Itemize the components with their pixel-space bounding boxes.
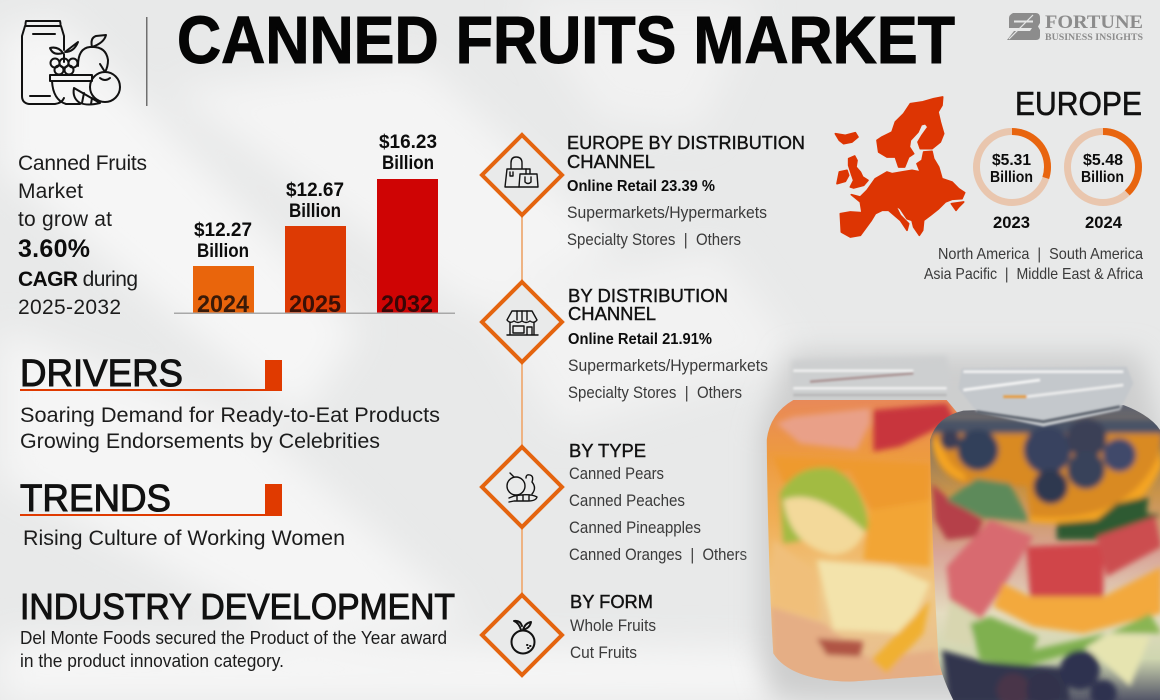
bar chart: $12.27 <box>194 219 252 241</box>
CAGR text block <box>18 152 147 319</box>
bar chart: Billion <box>197 240 249 262</box>
icon: can with fruits <box>22 21 120 104</box>
right jar <box>927 367 1160 700</box>
trends text: Rising Culture of Working Women <box>23 526 345 550</box>
segment: by distribution channel: Online Retail 21.91% <box>568 331 712 348</box>
segment: by distribution channel <box>482 282 768 402</box>
drivers text: Soaring Demand for Ready-to-Eat Products <box>20 403 440 427</box>
trends heading: TRENDS <box>20 478 171 520</box>
donut 2024: $5.48 <box>1083 152 1123 169</box>
segment: by type: Canned Pineapples <box>569 519 701 537</box>
donut 2024: 2024 <box>1085 213 1123 232</box>
timeline line <box>521 210 523 600</box>
donut 2024 <box>1068 132 1138 232</box>
CAGR text block: 3.60% <box>18 235 90 263</box>
segment: Europe by distribution channel <box>482 132 805 249</box>
segment: by type: Canned Oranges | Others <box>569 546 747 564</box>
segment: Europe by distribution channel: Online Retail 23.39 % <box>567 178 715 195</box>
other regions <box>924 246 1143 283</box>
industry development heading: INDUSTRY DEVELOPMENT <box>20 586 455 627</box>
bar chart: 2025 <box>289 291 341 318</box>
segment: Europe by distribution channel: CHANNEL <box>567 151 655 172</box>
segment: by form: Cut Fruits <box>570 644 637 662</box>
CAGR text block: to grow at <box>18 208 112 231</box>
icon: orange <box>482 595 562 675</box>
drivers heading <box>20 353 282 395</box>
segment: by distribution channel: Supermarkets/Hypermarkets <box>568 357 768 375</box>
donut 2023: 2023 <box>993 213 1030 232</box>
segment: by distribution channel: Specialty Stores | Others <box>568 384 742 402</box>
industry development text: Del Monte Foods secured the Product of the Year award <box>20 628 447 648</box>
donut 2023: $5.31 <box>992 152 1031 169</box>
left jar <box>763 356 967 687</box>
drivers text <box>20 403 440 453</box>
CAGR text block: Market <box>18 180 83 203</box>
CAGR text block: Canned Fruits <box>18 152 147 175</box>
donut 2023: Billion <box>990 169 1033 186</box>
trends heading <box>20 478 282 520</box>
segment: by type: Canned Peaches <box>569 492 685 510</box>
icon: shopping bags <box>482 135 562 215</box>
jar shadow <box>760 353 1160 700</box>
segment: by type: Canned Pears <box>569 465 664 483</box>
segment: by form: BY FORM <box>570 591 653 612</box>
drivers heading: DRIVERS <box>20 353 183 395</box>
segment: Europe by distribution channel: Supermarkets/Hypermarkets <box>567 204 767 222</box>
donut 2024: Billion <box>1081 169 1124 186</box>
industry development text <box>20 628 447 671</box>
logo: FORTUNE <box>1045 12 1143 33</box>
industry development text: in the product innovation category. <box>20 651 284 671</box>
segment: by form <box>482 591 656 675</box>
bar chart: $12.67 <box>286 179 344 201</box>
CAGR text block: CAGR during <box>18 268 138 291</box>
divider <box>146 17 148 106</box>
icon: mixed fruits and vegetables <box>482 447 562 527</box>
bar chart <box>174 131 455 318</box>
bar chart: Billion <box>289 200 341 222</box>
CAGR text block: 2025-2032 <box>18 296 121 319</box>
segment: by type <box>482 440 747 564</box>
bar chart: $16.23 <box>379 131 437 153</box>
segment: by distribution channel: BY DISTRIBUTION <box>568 285 728 306</box>
icon: storefront <box>482 282 562 362</box>
segment: by form: Whole Fruits <box>570 617 656 635</box>
map of Europe <box>835 97 965 237</box>
segment: Europe by distribution channel: Specialty Stores | Others <box>567 231 741 249</box>
drivers text: Growing Endorsements by Celebrities <box>20 429 380 453</box>
segment: by type: BY TYPE <box>569 440 646 461</box>
title: CANNED FRUITS MARKET <box>177 3 955 78</box>
bar chart: 2032 <box>381 291 433 318</box>
bar chart: Billion <box>382 152 434 174</box>
other regions: North America | South America <box>938 246 1143 263</box>
bar chart: 2024 <box>197 291 250 318</box>
Europe heading: EUROPE <box>1015 85 1142 122</box>
donut 2023 <box>976 132 1048 232</box>
photo: jars of fruit <box>760 353 1160 700</box>
segment: by distribution channel: CHANNEL <box>568 303 656 324</box>
segment: Europe by distribution channel: EUROPE BY DISTRIBUTION <box>567 132 805 153</box>
logo: BUSINESS INSIGHTS <box>1045 33 1143 43</box>
logo <box>1007 12 1143 43</box>
